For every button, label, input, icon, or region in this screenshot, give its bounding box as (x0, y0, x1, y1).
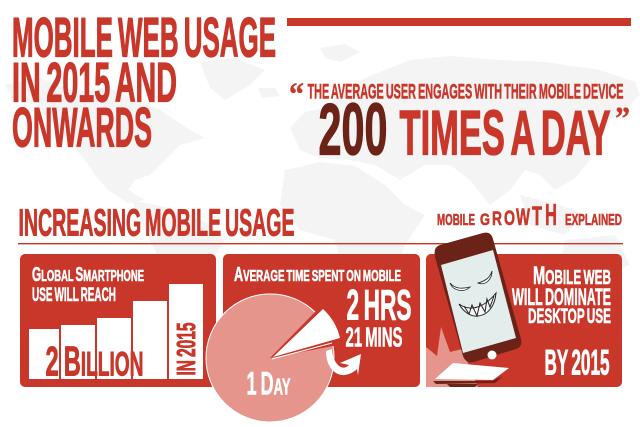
heading: mobile growth explained (437, 197, 622, 232)
heading: mobile growth explained: T (532, 201, 542, 231)
icon: evil phone (435, 233, 521, 362)
panel heading: global smartphone: GLOBAL SMARTPHONE (32, 264, 144, 286)
phone grin (459, 293, 496, 316)
pie chart (206, 294, 340, 422)
quote callout: ” (615, 101, 630, 137)
panel: time spent (206, 254, 420, 422)
heading: mobile growth explained: MOBILE (437, 212, 475, 229)
quote callout: “ (289, 77, 304, 113)
arrow (326, 349, 361, 375)
panel heading: global smartphone (32, 264, 144, 306)
world map background (5, 44, 640, 300)
heading: mobile growth explained: W (516, 204, 530, 231)
starburst (426, 327, 478, 387)
broken desktop (433, 363, 509, 387)
stat: 2 hrs: 2 HRS (346, 282, 412, 330)
heading: mobile growth explained: H (545, 197, 557, 232)
panel text (512, 262, 611, 382)
text: MOBILE WEB USAGE (12, 6, 276, 68)
panel: smartphone use (20, 254, 216, 387)
bar chart (29, 284, 203, 379)
heading: mobile growth explained: R (492, 209, 502, 230)
panel heading: global smartphone: USE WILL REACH (32, 285, 116, 306)
heading: mobile growth explained: G (480, 210, 490, 229)
stat: 21 mins: 21 MINS (346, 322, 402, 352)
quote callout (289, 77, 630, 170)
label: 2 billion: 2 BILLION (46, 338, 144, 384)
pie label: 1 day: 1 DAY (246, 366, 290, 402)
top bar (287, 18, 631, 26)
title (12, 6, 276, 158)
heading: mobile growth explained: O (504, 207, 515, 230)
section heading: increasing mobile usage: INCREASING MOBILE USAGE (18, 202, 294, 244)
title: ONWARDS (12, 96, 152, 158)
title: IN 2015 AND (12, 50, 177, 114)
panel: mobile web (426, 233, 622, 387)
panel heading: average time: AVERAGE TIME SPENT ON MOBILE (234, 264, 401, 286)
pie slice (273, 309, 340, 357)
label: in 2015: IN 2015 (171, 322, 201, 376)
phone eyes (450, 271, 492, 290)
quote callout: 200 (318, 90, 388, 170)
